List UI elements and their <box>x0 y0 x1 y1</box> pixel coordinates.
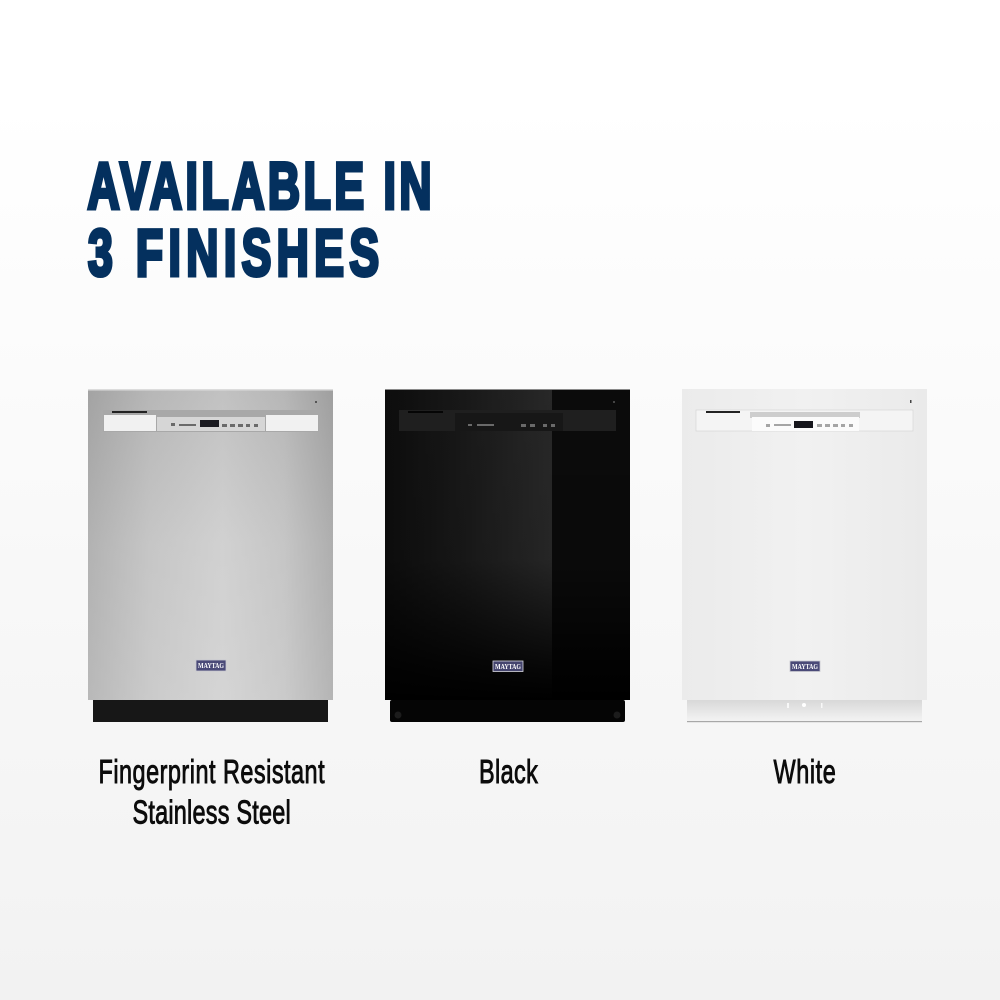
toe kick: black <box>390 700 625 722</box>
label: stainless steel: Stainless Steel <box>132 795 291 832</box>
label: white: White <box>774 754 836 791</box>
control panel: white <box>696 400 913 431</box>
badge: Maytag: MAYTAG <box>792 663 818 671</box>
title: 3 FINISHES <box>88 216 379 289</box>
badge: Maytag <box>196 660 226 671</box>
control panel: black <box>399 401 616 431</box>
label: black: Black <box>479 754 538 791</box>
badge: Maytag: MAYTAG <box>495 663 521 671</box>
panel: black dishwasher <box>385 389 630 722</box>
label: stainless steel <box>98 754 325 832</box>
toe kick: white <box>687 700 922 722</box>
door: white <box>682 389 927 700</box>
badge: Maytag: MAYTAG <box>198 662 224 670</box>
badge: Maytag <box>493 661 523 672</box>
label: stainless steel: Fingerprint Resistant <box>98 754 325 791</box>
title: AVAILABLE IN <box>88 149 432 222</box>
door: black <box>385 389 630 700</box>
toe kick: stainless steel <box>93 700 328 722</box>
control panel: stainless steel <box>103 401 319 432</box>
title <box>88 149 432 289</box>
panel: stainless steel dishwasher <box>88 389 333 722</box>
door: stainless steel <box>88 389 333 700</box>
badge: Maytag <box>790 661 820 672</box>
panel: white dishwasher <box>682 389 927 722</box>
